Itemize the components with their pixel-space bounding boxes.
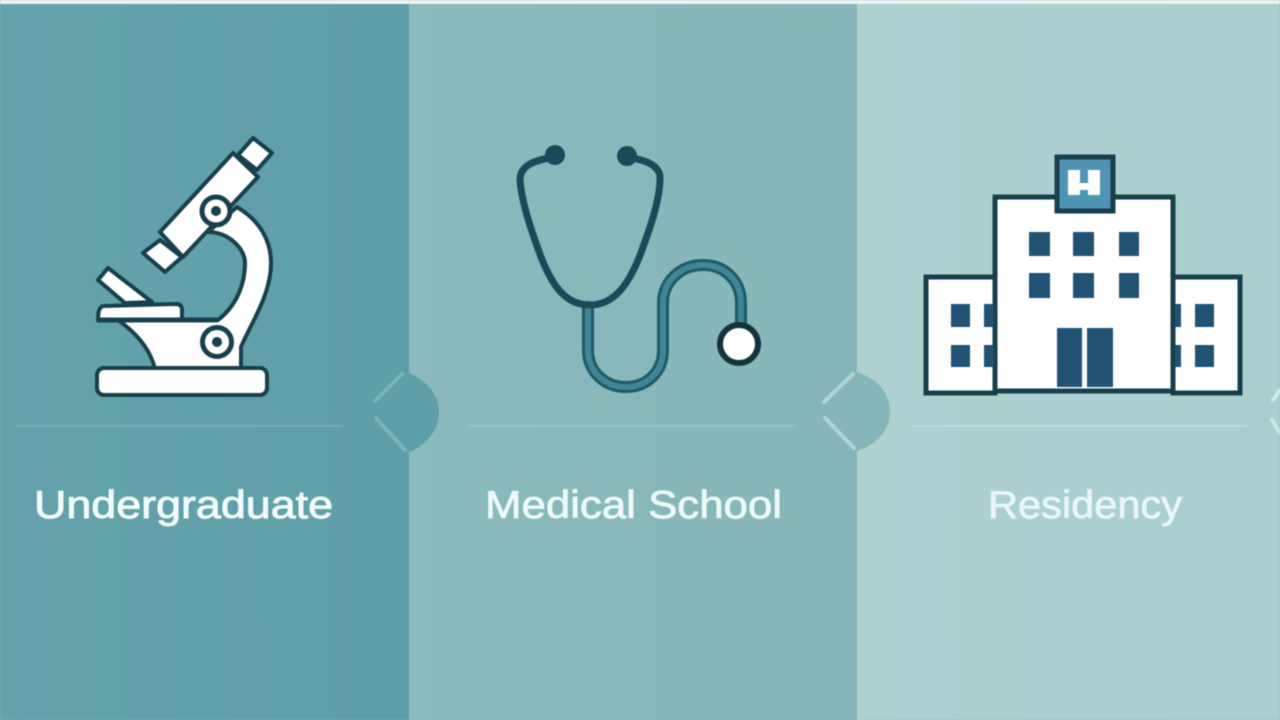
arrow connector: residency edge: [1272, 390, 1280, 433]
arrow connector: medical school to residency: [823, 372, 890, 451]
top edge strip: [0, 0, 1280, 4]
heading: medical school: Medical School: [485, 484, 782, 527]
heading: undergraduate: Undergraduate: [34, 484, 333, 527]
icon: stethoscope: [520, 145, 758, 387]
arrow connector: undergraduate to medical school: [374, 372, 439, 453]
icon: microscope: [97, 138, 272, 395]
heading: residency: Residency: [988, 484, 1183, 527]
icon: hospital building: [926, 157, 1240, 393]
